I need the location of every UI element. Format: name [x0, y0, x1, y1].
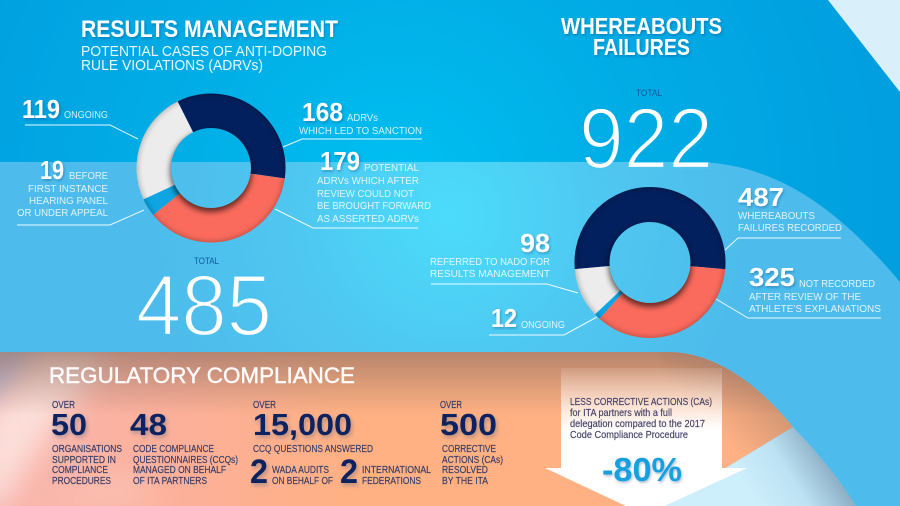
stat: 2 WADA audits on behalf of 2 international federations: WADA AUDITS [272, 465, 329, 476]
stat: 2 WADA audits on behalf of 2 international federations: 2 [340, 453, 358, 491]
callout: 19 before first instance [17, 155, 144, 225]
stat: over 500 corrective actions: CORRECTIVE [442, 444, 496, 455]
callout: 179 potential ADRVs: BE BROUGHT FORWARD [317, 200, 431, 212]
total label: TOTAL [194, 256, 219, 267]
donut chart: whereabouts failures [574, 187, 726, 338]
stat: 48 questionnaires: QUESTIONNAIRES (CCQs) [133, 455, 238, 466]
callout: 325 not recorded: AFTER REVIEW OF THE [749, 291, 861, 303]
stat: over 50 organisations: SUPPORTED IN [52, 455, 116, 466]
corner: pale triangle top right [828, 0, 900, 92]
stat: over 50 organisations [51, 400, 122, 487]
stat: over 50 organisations: COMPLIANCE [52, 465, 108, 476]
total label: TOTAL [636, 88, 662, 99]
callout: 19 before first instance: FIRST INSTANCE [28, 183, 108, 195]
panel background: peach band [0, 340, 800, 506]
stat: over 500 corrective actions [440, 400, 503, 487]
stat: over 500 corrective actions: RESOLVED [442, 465, 488, 476]
stat: over 15,000 questions: CCQ QUESTIONS ANSWERED [253, 444, 373, 455]
heading: results management: RESULTS MANAGEMENT [81, 16, 338, 43]
heading: whereabouts failures: FAILURES [593, 34, 690, 60]
arrow figure: -80%: -80% [602, 451, 682, 488]
stat: over 50 organisations: 50 [51, 407, 87, 442]
panel: whereabouts failures [430, 13, 881, 344]
callout: 19 before first instance: 19 [40, 155, 64, 185]
stat: over 50 organisations: ORGANISATIONS [52, 444, 122, 455]
stat: over 500 corrective actions: ACTIONS (CAs) [442, 455, 503, 466]
callout: 98 referred to NADO: RESULTS MANAGEMENT [430, 268, 551, 280]
callout: 179 potential ADRVs: 179 [320, 146, 360, 176]
callout: 19 before first instance: HEARING PANEL [29, 195, 108, 207]
stat: 2 WADA audits on behalf of 2 international federations [250, 453, 431, 491]
stat: 48 questionnaires [130, 407, 238, 487]
stat: over 500 corrective actions: 500 [440, 407, 497, 442]
arrow text: Code Compliance Procedure [570, 429, 688, 441]
callout: 179 potential ADRVs: AS ASSERTED ADRVs [317, 213, 419, 225]
callout: 179 potential ADRVs: REVIEW COULD NOT [317, 188, 415, 200]
callout: 179 potential ADRVs [275, 146, 431, 228]
callout: 325 not recorded [716, 262, 881, 318]
callout: 179 potential ADRVs: ADRVs WHICH AFTER [317, 175, 419, 187]
callout: 487 recorded [725, 182, 842, 250]
stat: 2 WADA audits on behalf of 2 international federations: FEDERATIONS [362, 476, 421, 487]
callout: 168 ADRVs [283, 97, 422, 147]
heading: whereabouts failures: WHEREABOUTS [561, 13, 722, 39]
stat: over 500 corrective actions: BY THE ITA [442, 476, 488, 487]
callout: 487 recorded: FAILURES RECORDED [738, 222, 842, 234]
callout arrow: -80% corrective actions [545, 368, 747, 506]
stat: 2 WADA audits on behalf of 2 international federations: 2 [250, 453, 268, 491]
stat: over 50 organisations: PROCEDURES [52, 476, 111, 487]
arrow text: for ITA partners with a full [570, 407, 672, 419]
wedge: pale blue under the band [663, 427, 856, 506]
subheading: potential cases [81, 44, 327, 74]
subheading: potential cases: RULE VIOLATIONS (ADRVs) [81, 58, 263, 74]
arrow text [570, 396, 712, 441]
callout: 12 ongoing: 12 [491, 303, 517, 333]
stat: over 500 corrective actions: OVER [440, 400, 462, 411]
arrow text: delegation compared to the 2017 [570, 418, 705, 430]
arrow shape [545, 368, 747, 506]
callout: 19 before first instance: BEFORE [69, 170, 108, 182]
callout: 325 not recorded: NOT RECORDED [799, 278, 875, 290]
stat: 2 WADA audits on behalf of 2 international federations: INTERNATIONAL [362, 465, 431, 476]
callout: 179 potential ADRVs: POTENTIAL [364, 162, 419, 174]
stat: over 50 organisations: OVER [52, 400, 75, 411]
callout: 168 ADRVs: ADRVs [347, 112, 378, 124]
stat: over 15,000 questions [253, 400, 373, 455]
stat: over 15,000 questions: 15,000 [253, 407, 352, 442]
callout: 119 ongoing: ONGOING [64, 109, 108, 121]
background: lower light blue curved band [0, 162, 900, 506]
heading: regulatory compliance: REGULATORY COMPLIANCE [49, 363, 355, 388]
arrow text: LESS CORRECTIVE ACTIONS (CAs) [570, 396, 712, 408]
stat: over 15,000 questions: OVER [253, 400, 276, 411]
stat: 48 questionnaires: MANAGED ON BEHALF [133, 465, 226, 476]
stat: 48 questionnaires: 48 [130, 407, 167, 442]
callout: 19 before first instance: OR UNDER APPEAL [17, 207, 108, 219]
callout: 98 referred to NADO: REFERRED TO NADO FOR [430, 256, 550, 268]
stat: 2 WADA audits on behalf of 2 international federations: ON BEHALF OF [272, 476, 333, 487]
callout: 168 ADRVs: WHICH LED TO SANCTION [299, 125, 422, 137]
callout: 325 not recorded: ATHLETE'S EXPLANATIONS [749, 303, 881, 315]
heading: whereabouts failures [561, 13, 722, 60]
total number: 485: 485 [136, 258, 272, 354]
callout: 98 referred to NADO [430, 228, 578, 293]
callout: 12 ongoing [489, 303, 597, 335]
stat: 48 questionnaires: OF ITA PARTNERS [133, 476, 207, 487]
donut chart: results management [136, 94, 286, 242]
callout: 119 ongoing: 119 [22, 94, 60, 124]
subheading: potential cases: POTENTIAL CASES OF ANTI-DOPING [81, 44, 327, 60]
panel: regulatory compliance [0, 340, 856, 506]
callout: 487 recorded: 487 [738, 182, 784, 212]
callout: 98 referred to NADO: 98 [520, 228, 550, 258]
total number: 922: 922 [579, 91, 713, 187]
callout: 487 recorded: WHEREABOUTS [738, 210, 815, 222]
callout: 325 not recorded: 325 [749, 262, 795, 292]
callout: 168 ADRVs: 168 [302, 97, 343, 127]
stat: 48 questionnaires: CODE COMPLIANCE [133, 444, 214, 455]
panel: results management [17, 16, 431, 354]
callout: 119 ongoing [22, 94, 138, 139]
callout: 12 ongoing: ONGOING [521, 319, 565, 331]
